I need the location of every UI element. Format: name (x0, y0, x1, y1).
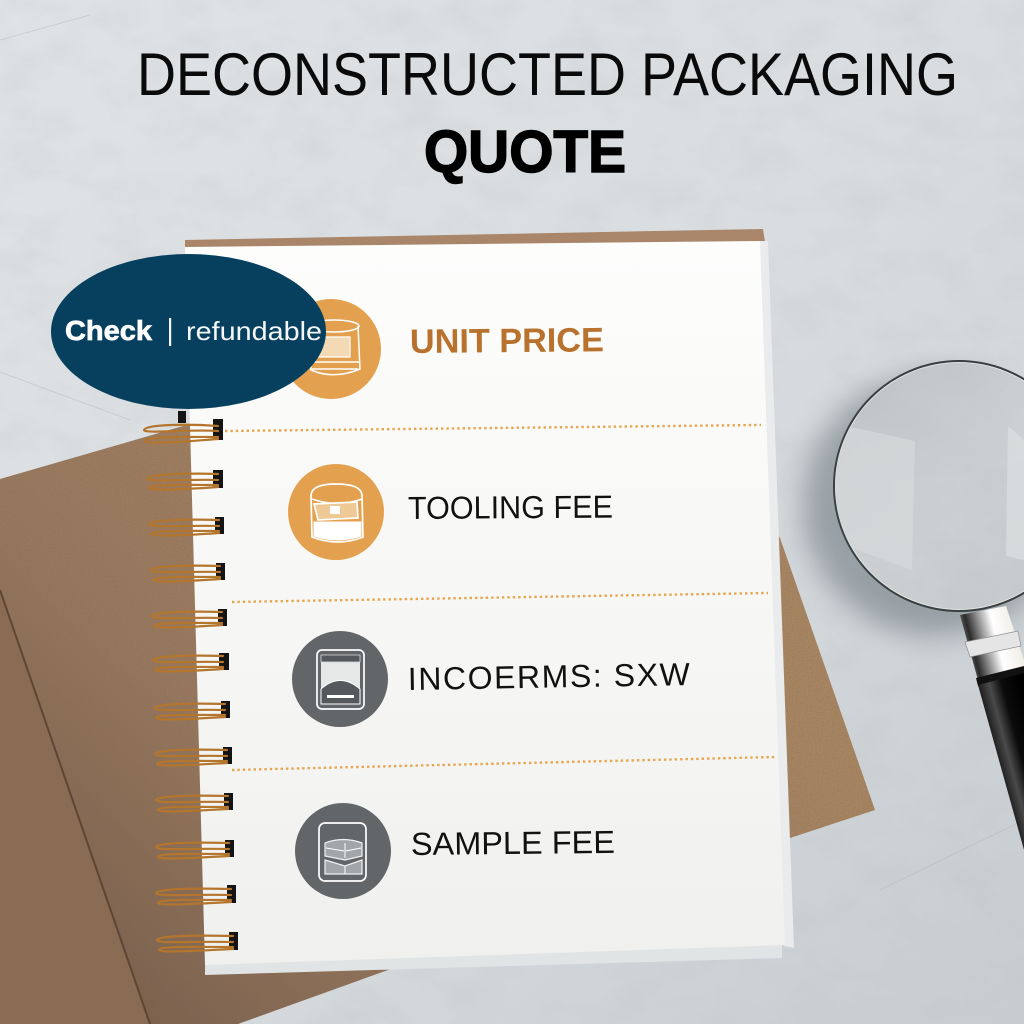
title: DECONSTRUCTED PACKAGING (137, 41, 958, 108)
spiral binding (144, 411, 238, 952)
label: unit price: UNIT PRICE (410, 321, 604, 361)
badge: check refundable: Check (65, 315, 152, 346)
icon: grey pouch (292, 631, 388, 727)
notebook pages (185, 241, 794, 975)
title: QUOTE (424, 119, 626, 185)
title (137, 41, 958, 185)
label: tooling fee: TOOLING FEE (408, 489, 613, 526)
magnifying glass (803, 360, 1024, 850)
badge: check refundable (51, 254, 326, 409)
label: sample fee: SAMPLE FEE (411, 824, 615, 862)
badge: check refundable: refundable (186, 316, 322, 346)
icon: grey stacked pack (295, 803, 391, 899)
row 4: sample fee (295, 803, 615, 899)
dotted dividers (225, 425, 775, 770)
icon: orange package tub (281, 299, 381, 399)
row 2: tooling fee (288, 464, 613, 560)
label: incoterms: INCOERMS: SXW (407, 656, 691, 697)
notebook back cover (0, 229, 875, 1024)
row 1: unit price (281, 299, 604, 399)
row 3: incoterms (292, 631, 691, 727)
icon: orange open container (288, 464, 384, 560)
